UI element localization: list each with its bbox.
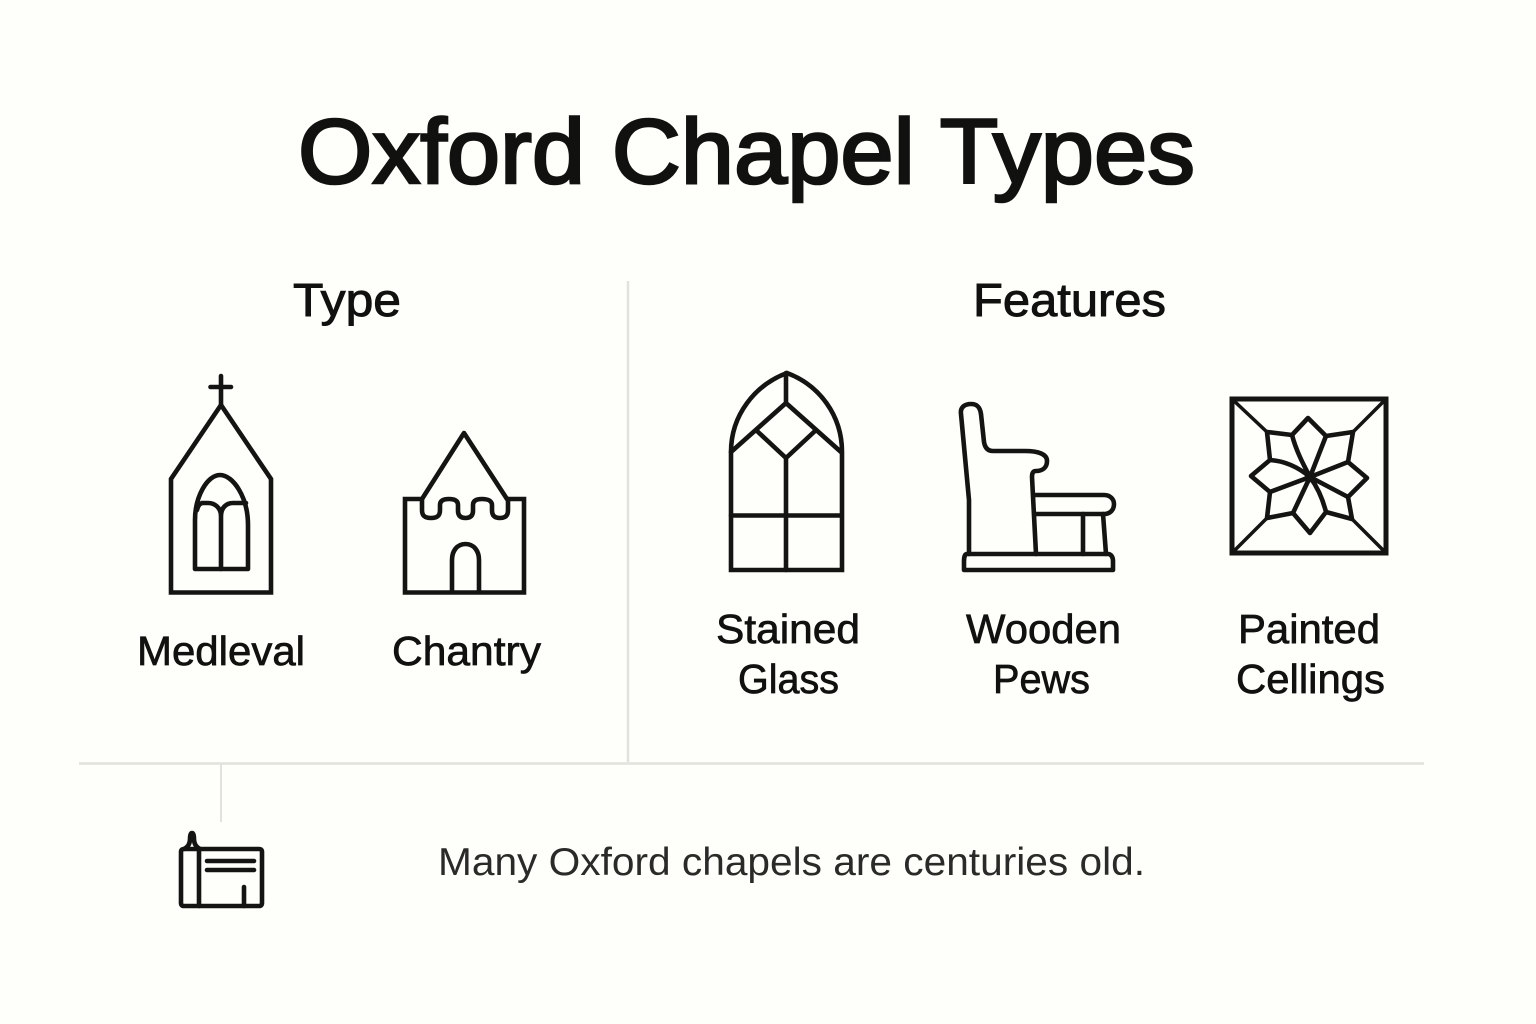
icon: medieval church: [171, 376, 271, 592]
label: painted ceilings: Cellings: [1236, 656, 1385, 702]
title: Oxford Chapel Types: [298, 101, 1195, 203]
icon: wooden pew: [961, 404, 1114, 570]
panel: type: [137, 274, 542, 674]
label: painted ceilings: [1236, 606, 1385, 702]
panel: features: [716, 274, 1386, 702]
icon: book note: [181, 833, 262, 906]
label: chantry: Chantry: [392, 628, 542, 674]
icon: painted ceiling: [1232, 399, 1386, 553]
heading: type: Type: [293, 274, 401, 326]
label: stained glass: Glass: [738, 656, 839, 702]
label: wooden pews: Pews: [993, 656, 1090, 702]
icon: stained glass window: [731, 373, 842, 570]
label: medieval: Medleval: [137, 628, 305, 674]
label: painted ceilings: Painted: [1238, 606, 1380, 652]
icon: chantry: [405, 433, 524, 592]
caption: Many Oxford chapels are centuries old.: [438, 841, 1145, 884]
label: stained glass: Stained: [716, 606, 860, 652]
heading: features: Features: [973, 274, 1166, 326]
label: wooden pews: [966, 606, 1121, 702]
label: stained glass: [716, 606, 860, 702]
label: wooden pews: Wooden: [966, 606, 1121, 652]
